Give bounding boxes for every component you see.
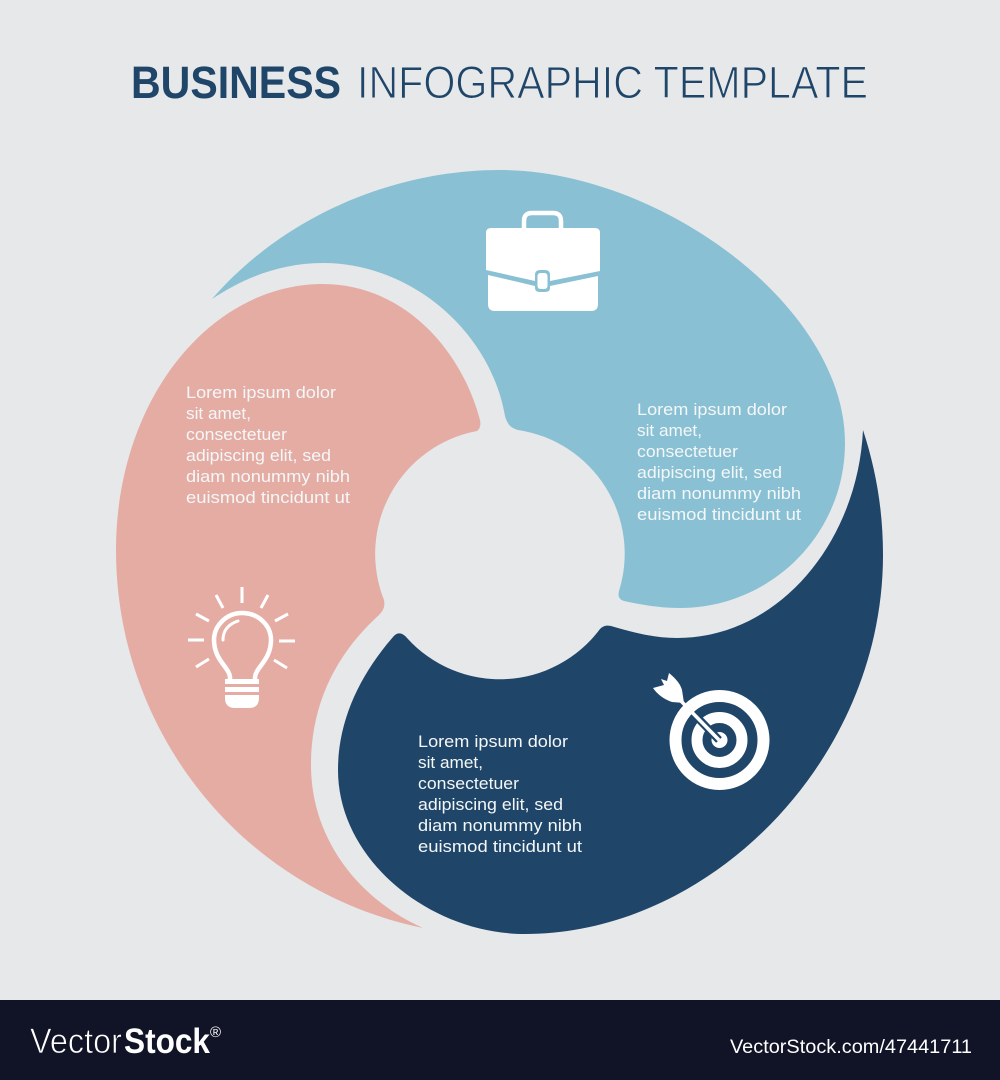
footer logo: ® [210, 1024, 221, 1041]
text: pink segment: adipiscing elit, sed [186, 446, 331, 465]
footer logo [30, 1022, 221, 1061]
footer image id: VectorStock.com/47441711 [730, 1036, 972, 1058]
text: pink segment: diam nonummy nibh [186, 467, 350, 486]
panel: navy segment [338, 430, 883, 934]
text: blue segment: sit amet, [637, 421, 702, 440]
text: navy segment: adipiscing elit, sed [418, 795, 563, 814]
text: blue segment: adipiscing elit, sed [637, 463, 782, 482]
text: navy segment: Lorem ipsum dolor [418, 732, 568, 751]
text: pink segment: euismod tincidunt ut [186, 488, 350, 507]
text: navy segment: consectetuer [418, 774, 519, 793]
text: blue segment: diam nonummy nibh [637, 484, 801, 503]
title [131, 57, 868, 108]
text: blue segment: consectetuer [637, 442, 738, 461]
panel: blue segment [212, 170, 845, 608]
icon: target with arrow [653, 673, 764, 784]
text: pink segment: sit amet, [186, 404, 251, 423]
text: blue segment: Lorem ipsum dolor [637, 400, 787, 419]
text: navy segment: diam nonummy nibh [418, 816, 582, 835]
footer logo: Vector [30, 1022, 122, 1061]
text: pink segment [186, 383, 350, 507]
text: blue segment: euismod tincidunt ut [637, 505, 801, 524]
text: navy segment: sit amet, [418, 753, 483, 772]
icon: briefcase [486, 213, 600, 311]
text: pink segment: consectetuer [186, 425, 287, 444]
panel: pink segment [116, 284, 480, 928]
icon: light bulb [188, 587, 295, 708]
title: BUSINESS [131, 57, 341, 108]
footer bar [0, 1000, 1000, 1080]
footer logo: Stock [124, 1022, 210, 1061]
text: navy segment: euismod tincidunt ut [418, 837, 582, 856]
text: pink segment: Lorem ipsum dolor [186, 383, 336, 402]
text: blue segment [637, 400, 801, 524]
title: INFOGRAPHIC TEMPLATE [357, 57, 868, 108]
text: navy segment [418, 732, 582, 856]
